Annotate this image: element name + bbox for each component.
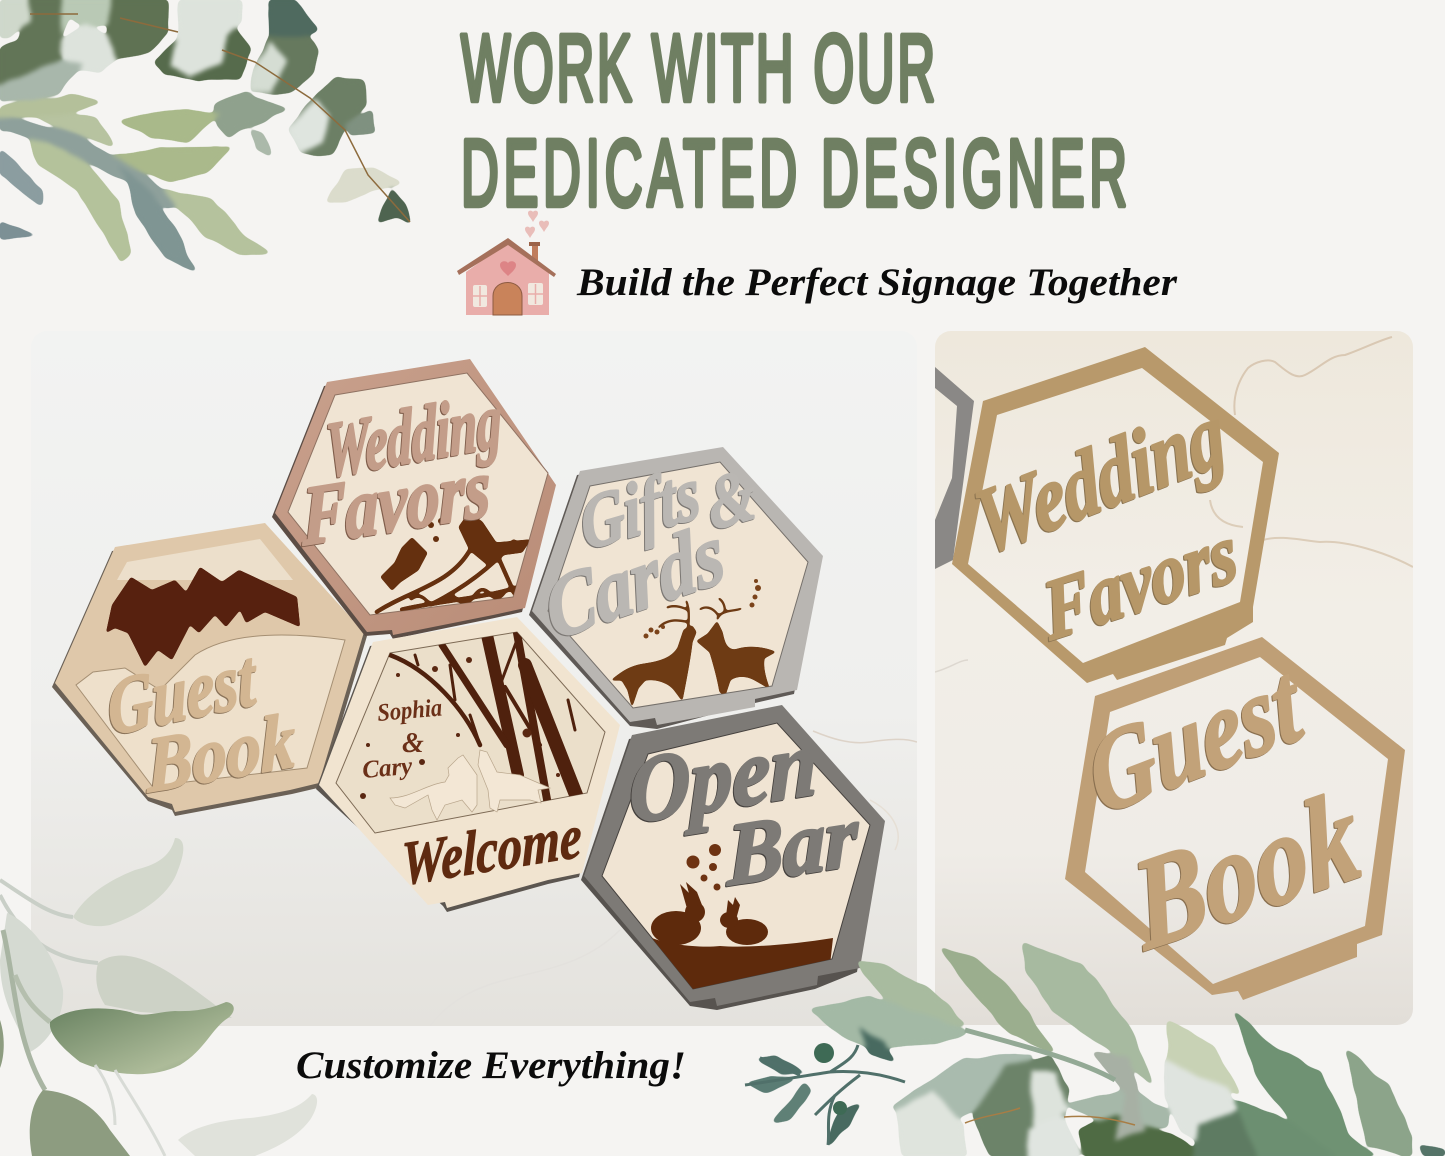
sign: guest book — [52, 523, 367, 816]
label: sophia and cary: & — [402, 728, 424, 759]
label: guest book gold lettering: Guest — [1078, 638, 1314, 839]
label: wedding favors lettering: Favors — [301, 441, 491, 564]
label: guest book lettering — [108, 658, 295, 794]
title — [461, 16, 1127, 227]
icon: foxes — [390, 750, 550, 820]
foliage: top left watercolor branches — [0, 0, 412, 272]
sign fragment: grey hexagon edge — [935, 367, 974, 569]
icon: hearts — [428, 518, 440, 542]
label: guest book gold lettering: Book — [1121, 761, 1370, 978]
sign: wedding favors rose — [272, 359, 556, 639]
label: sophia and cary: Sophia — [376, 694, 443, 727]
icon: mountains and pines — [106, 567, 300, 667]
label: wedding favors lettering — [301, 400, 500, 548]
label: wedding favors gold lettering: Favors — [1036, 505, 1244, 659]
foliage: bottom right stems and berries — [745, 1030, 1135, 1145]
sign: gifts and cards silver — [529, 447, 823, 729]
label: gifts and cards lettering: Cards — [538, 503, 732, 660]
label: wedding favors gold lettering: Wedding — [966, 381, 1234, 575]
sign: gold wedding favors — [952, 347, 1279, 683]
foliage: bottom right watercolor branches — [743, 942, 1445, 1156]
foliage: bottom left soft leaves — [0, 838, 317, 1156]
label: gifts and cards lettering: Gifts — [575, 449, 705, 567]
sign: welcome cream — [316, 617, 620, 912]
label: gifts and cards lettering: & — [703, 452, 761, 547]
subtitle: Build the Perfect Signage Together — [576, 261, 1178, 304]
icon: birds on branch — [375, 513, 530, 613]
icon: hearts — [686, 844, 721, 890]
sign: open bar grey — [581, 705, 885, 1010]
label: open bar lettering: Bar — [726, 786, 860, 905]
title: WORK WITH OUR — [461, 16, 935, 122]
label: open bar lettering: Open — [629, 710, 818, 844]
label: sophia and cary — [363, 699, 442, 780]
label: sophia and cary: Cary — [361, 753, 414, 784]
label: wedding favors gold lettering — [974, 421, 1236, 642]
icon: two deer — [612, 598, 775, 706]
caption: Customize Everything! — [296, 1044, 686, 1087]
label: wedding favors lettering: Wedding — [325, 376, 503, 494]
sign: gold guest book — [1065, 637, 1405, 1000]
panel: gold signs photo — [935, 331, 1413, 1025]
label: open bar lettering — [630, 750, 860, 888]
label: welcome: Welcome — [401, 801, 582, 899]
label: guest book lettering: Book — [145, 696, 296, 809]
icon: pink house with hearts — [457, 211, 556, 315]
icon: birch trees — [360, 633, 578, 805]
icon: rabbits on ground — [651, 882, 833, 990]
foliage: top left stems — [30, 14, 410, 222]
icon: hearts — [644, 579, 761, 638]
panel: hexagon signs photo — [31, 331, 917, 1026]
label: guest book gold lettering — [1092, 676, 1362, 953]
title: DEDICATED DESIGNER — [461, 121, 1127, 227]
label: guest book lettering: Guest — [105, 632, 260, 753]
